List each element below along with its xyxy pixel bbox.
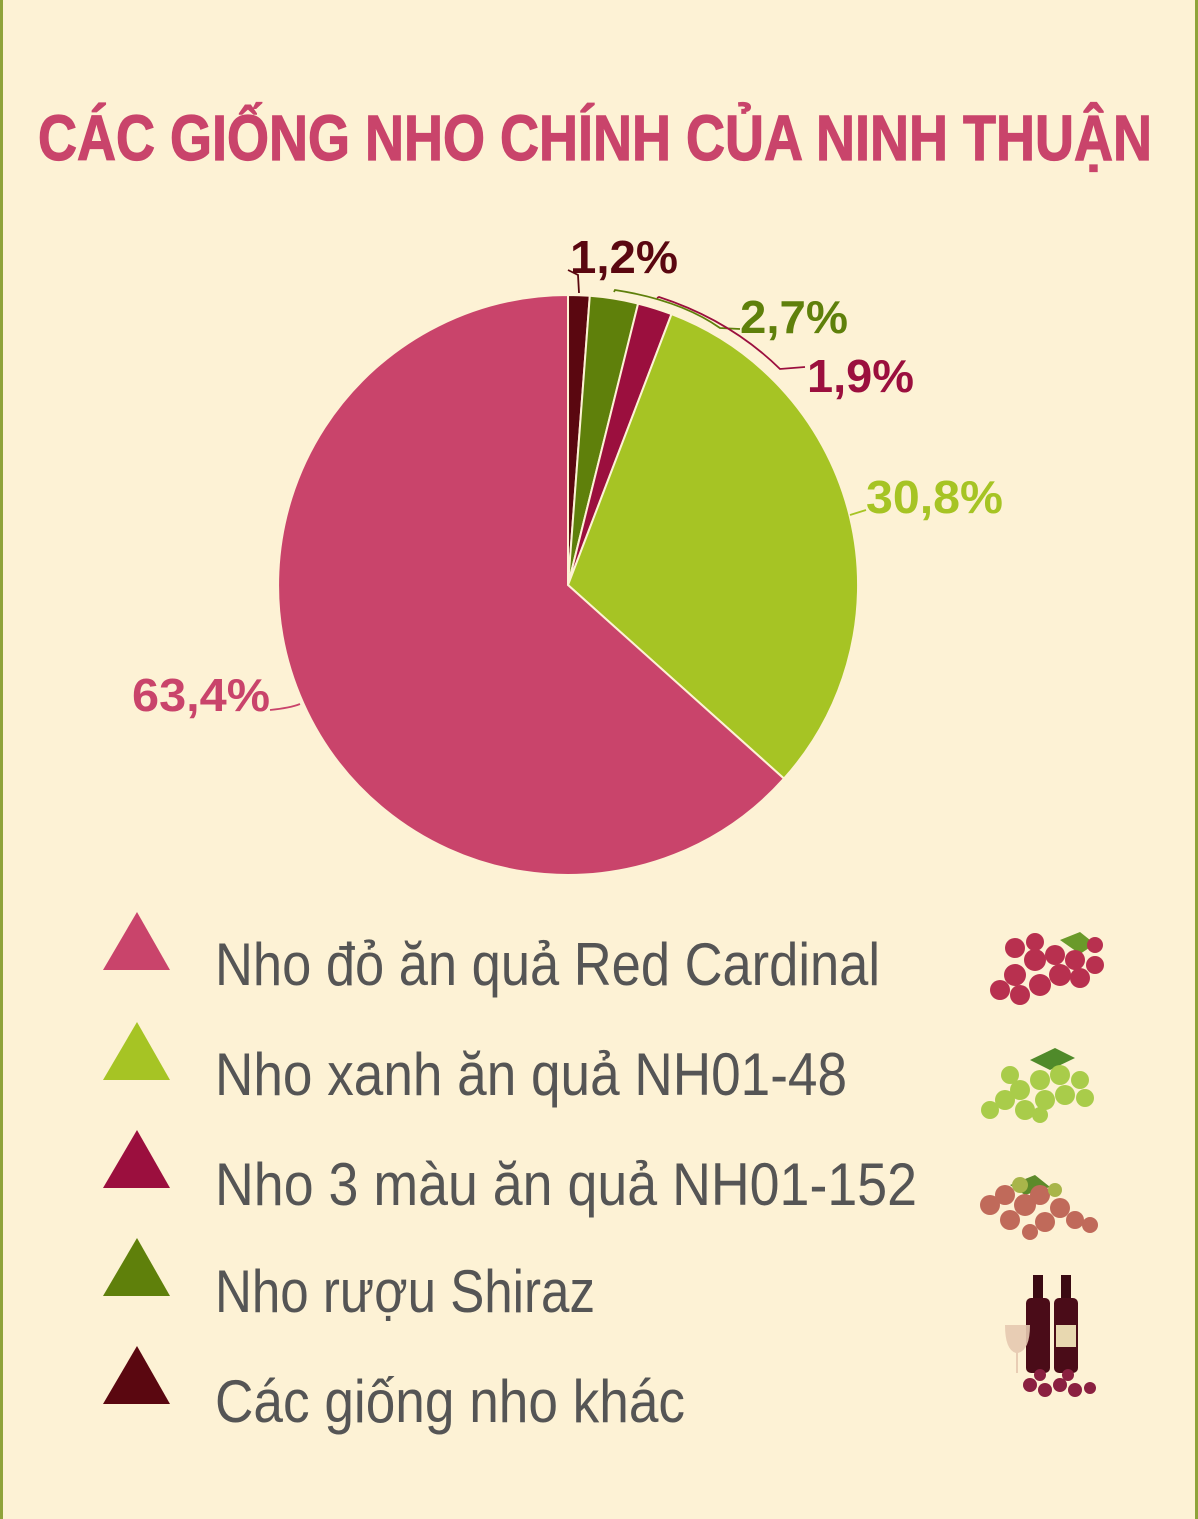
legend item: NH01-152: Nho 3 màu ăn quả NH01-152	[215, 1151, 917, 1218]
legend	[103, 912, 917, 1435]
legend item: Shiraz: Nho rượu Shiraz	[215, 1258, 595, 1325]
legend item: Red Cardinal	[103, 912, 880, 998]
slice: other 1.2%	[568, 295, 590, 585]
icon: wine bottles	[1005, 1275, 1096, 1397]
icon: tricolor grapes	[980, 1175, 1098, 1240]
pie labels: 30,8%	[866, 471, 1003, 523]
pie labels: 2,7%	[740, 291, 848, 343]
legend item: others	[103, 1346, 685, 1435]
legend item: NH01-48: Nho xanh ăn quả NH01-48	[215, 1041, 847, 1108]
icon: green grapes	[981, 1048, 1094, 1123]
legend item: NH01-152	[103, 1130, 917, 1218]
icon: red grapes	[990, 932, 1104, 1005]
legend item: NH01-48	[103, 1022, 847, 1108]
pie labels: 63,4%	[132, 669, 270, 721]
leader lines	[270, 270, 866, 710]
slice: Shiraz 2.7%	[568, 296, 638, 585]
slice: Red Cardinal 63.4%	[278, 295, 784, 875]
pie labels	[132, 231, 1003, 721]
legend item: others: Các giống nho khác	[215, 1368, 685, 1435]
pie labels: 1,9%	[807, 350, 914, 402]
pie labels: 1,2%	[570, 231, 678, 283]
slice: NH01-152 1.9%	[568, 304, 672, 585]
legend item: Red Cardinal: Nho đỏ ăn quả Red Cardinal	[215, 931, 880, 998]
legend item: Shiraz	[103, 1238, 595, 1325]
slice: NH01-48 30.8%	[568, 314, 858, 779]
pie chart	[278, 295, 858, 875]
